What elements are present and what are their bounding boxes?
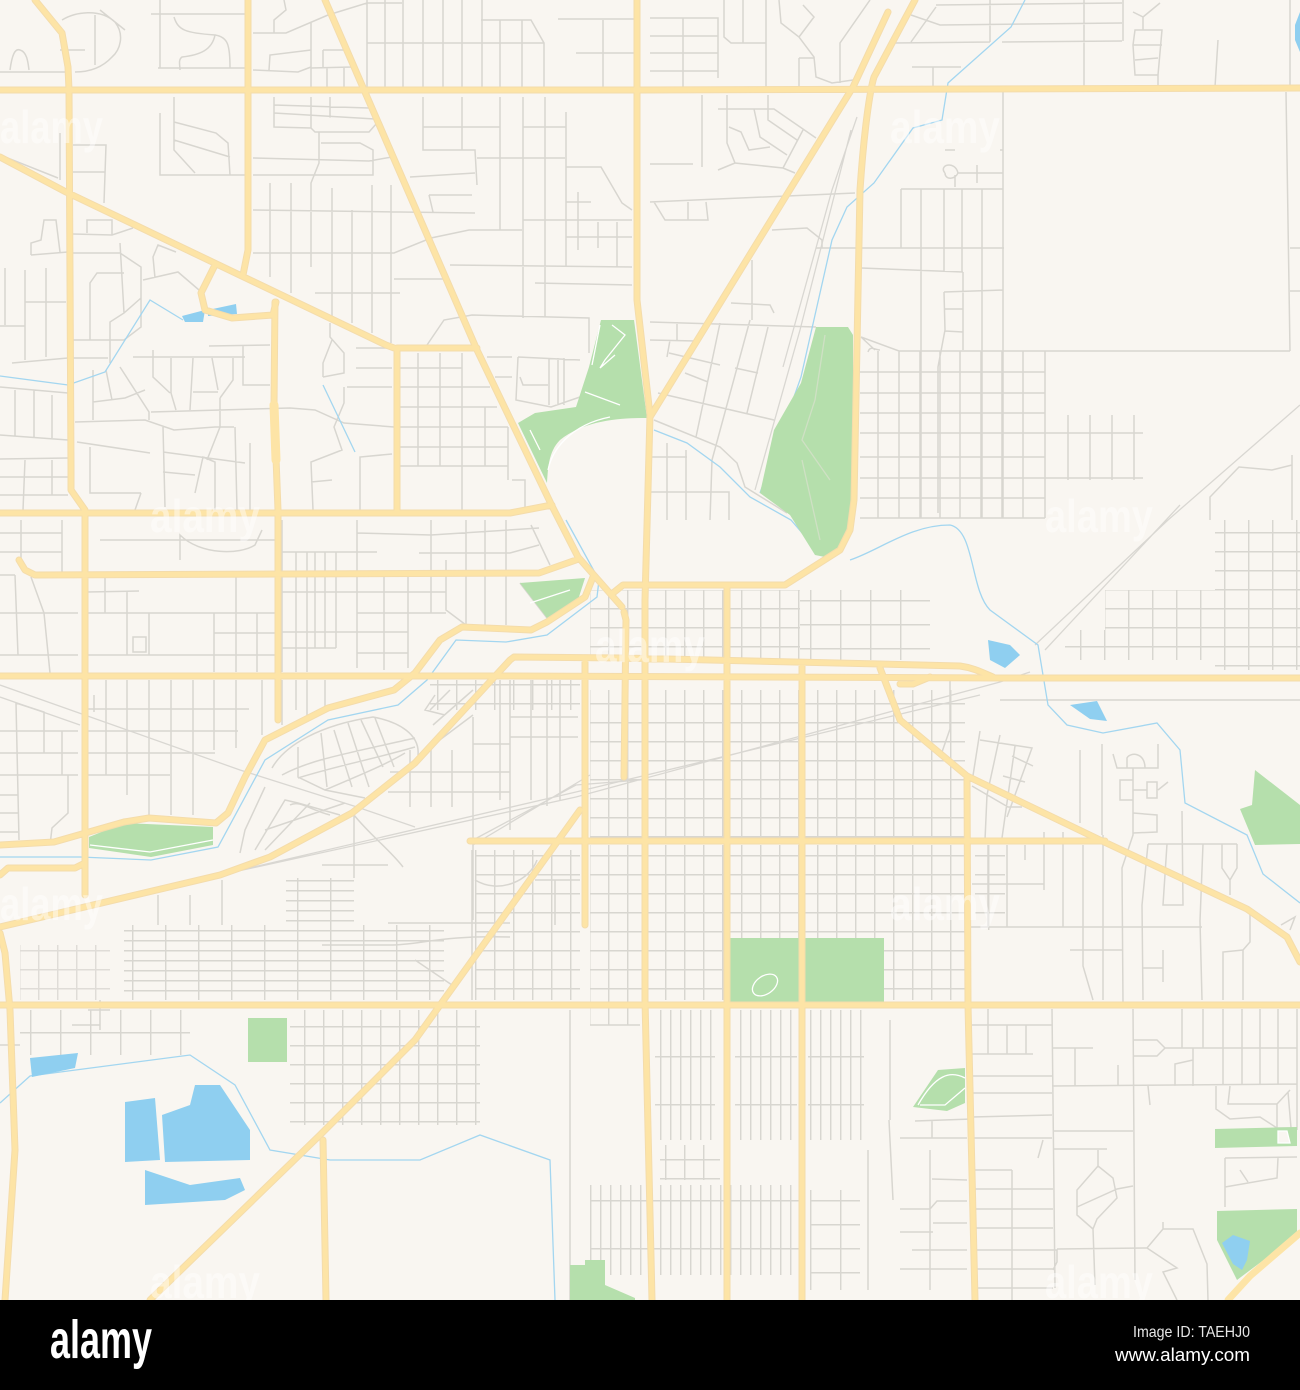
park: south xyxy=(913,1068,965,1111)
park: west strip xyxy=(89,823,213,857)
lake: southeast pond xyxy=(1222,1235,1250,1270)
park: southeast corner xyxy=(1217,1209,1297,1280)
park: downtown triangle xyxy=(520,578,585,618)
footer banner xyxy=(0,1300,1300,1390)
watermarks: alamy xyxy=(1045,1256,1153,1308)
watermarks: alamy xyxy=(150,490,260,542)
park: southeast strip xyxy=(1215,1127,1297,1148)
northwest streets xyxy=(0,0,634,510)
park: southwest square xyxy=(248,1018,287,1062)
lake: east small xyxy=(1070,701,1107,721)
lake: northeast corner xyxy=(1295,12,1300,52)
park: east xyxy=(1240,770,1300,845)
watermarks: alamy xyxy=(1045,490,1153,542)
logo: alamy: alamy xyxy=(50,1310,152,1370)
east and southeast streets xyxy=(570,680,1300,1300)
park: central square xyxy=(730,938,884,1002)
park: bottom xyxy=(570,1260,635,1300)
watermarks: alamy xyxy=(890,101,1000,153)
image id: Image ID: TAEHJ0 xyxy=(1133,1324,1250,1341)
railways xyxy=(0,117,1300,875)
park: north riverside xyxy=(518,320,647,483)
watermarks: alamy xyxy=(150,1256,260,1308)
northeast streets xyxy=(650,0,1300,520)
watermarks: alamy xyxy=(890,878,1000,930)
watermarks: alamy xyxy=(0,878,103,930)
lake: east pond xyxy=(988,640,1020,668)
lake: large west xyxy=(125,1098,160,1162)
watermarks xyxy=(0,101,1153,1308)
park: east riverside xyxy=(760,327,853,558)
watermarks: alamy xyxy=(0,101,103,153)
website: www.alamy.com xyxy=(1114,1345,1250,1365)
lake: far west xyxy=(30,1053,78,1077)
lake: south xyxy=(145,1170,245,1205)
watermarks: alamy xyxy=(595,620,705,672)
lake: northwest pond xyxy=(182,304,237,322)
west and central streets xyxy=(0,520,580,1045)
lake: large center xyxy=(162,1085,250,1162)
park paths xyxy=(90,325,1290,1143)
